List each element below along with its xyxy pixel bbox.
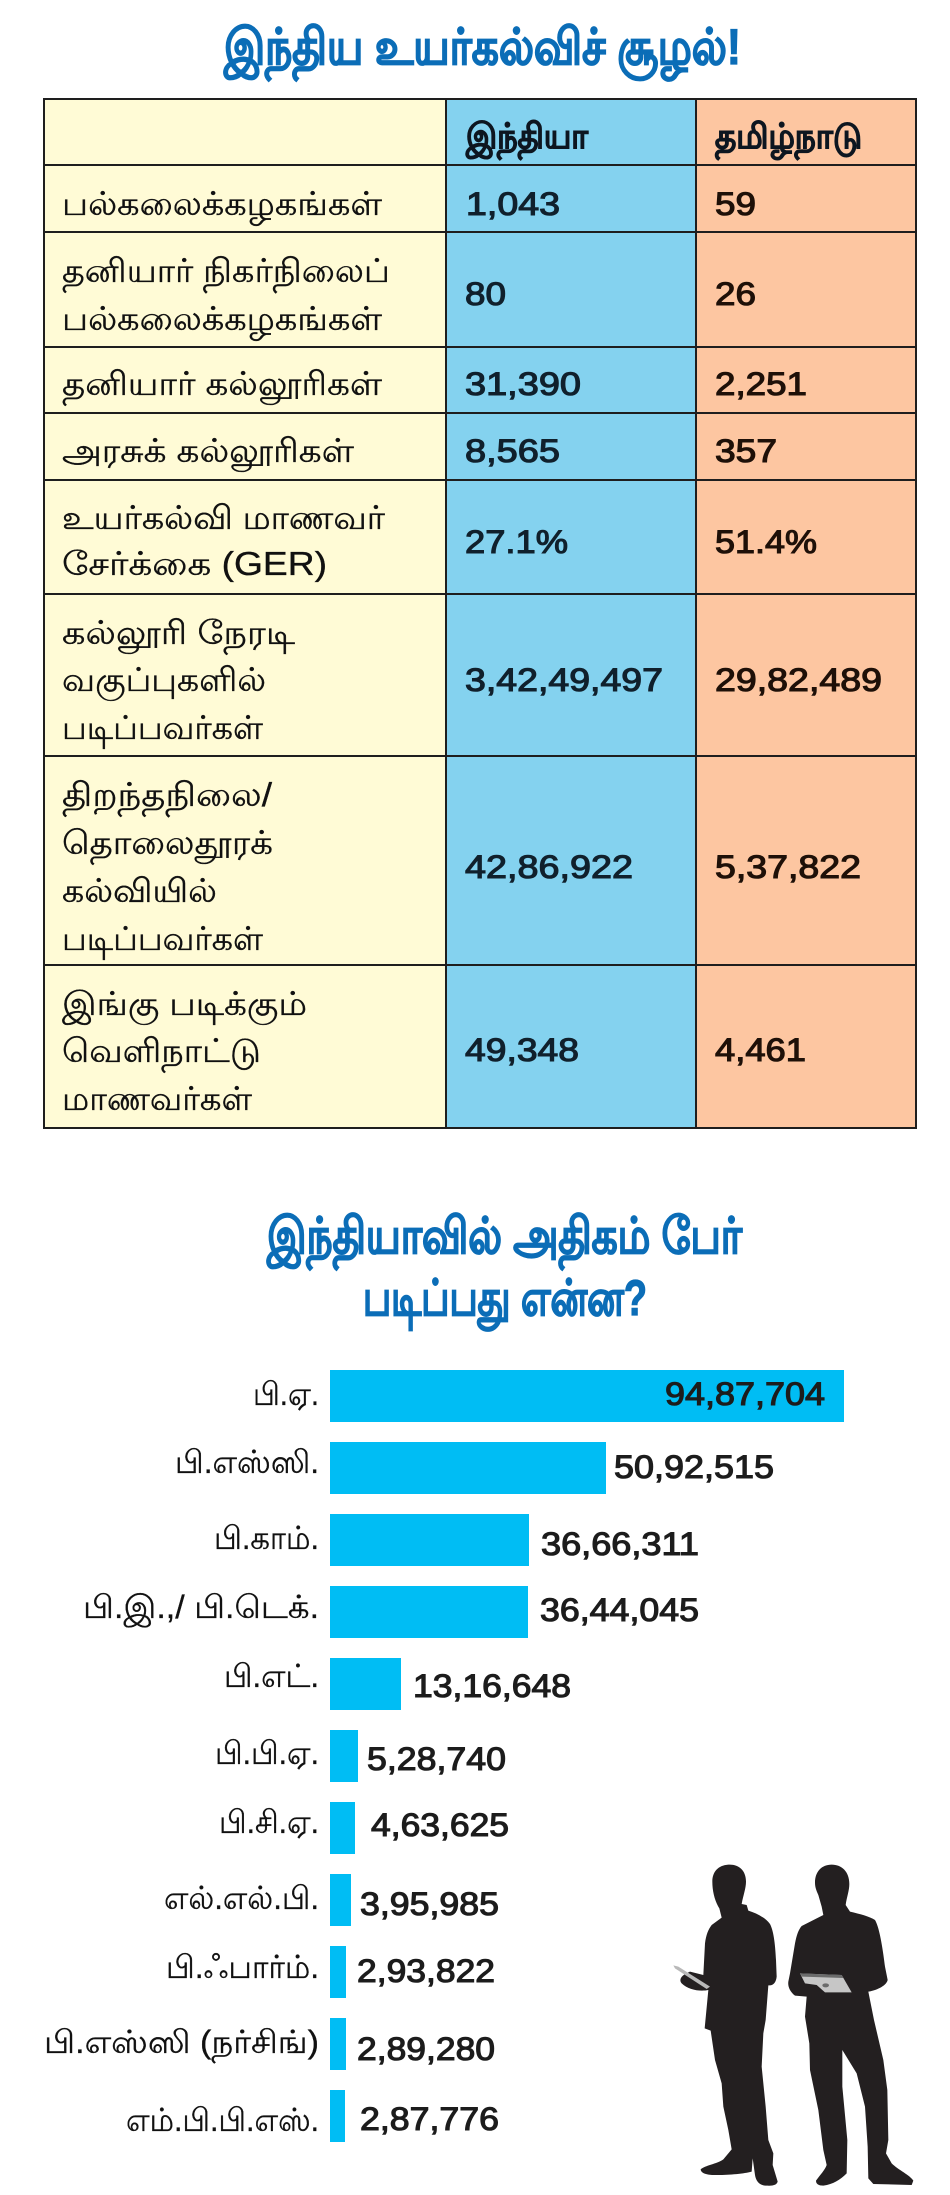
row: universities: 1,043 (466, 186, 560, 222)
bar: BPharm: 2,93,822 (357, 1953, 495, 1989)
row: universities: பல்கலைக்கழகங்கள் (62, 185, 382, 226)
row: private deemed universities (62, 252, 756, 341)
row: table header: தமிழ்நாடு (715, 117, 862, 161)
bar: MBBS: 2,87,776 (360, 2101, 499, 2137)
row: regular college students: கல்லூரி நேரடி (62, 614, 295, 655)
bar: BE / BTech: பி.இ.,/ பி.டெக். (83, 1589, 319, 1627)
row: foreign students: இங்கு படிக்கும் (62, 985, 307, 1025)
row: private colleges: 2,251 (715, 366, 807, 402)
row: foreign students: மாணவர்கள் (62, 1080, 252, 1117)
bar: BEd: பி.எட். (224, 1658, 319, 1694)
row: foreign students: 49,348 (465, 1032, 579, 1068)
row: open and distance learning students (62, 776, 861, 960)
bar: BA (253, 1370, 844, 1422)
icon: left tablet (673, 1965, 710, 1989)
bar: BCA: 4,63,625 (371, 1807, 509, 1843)
row: gross enrolment ratio (62, 499, 817, 582)
row: foreign students: வெளிநாட்டு (62, 1032, 261, 1073)
row: government colleges: அரசுக் கல்லூரிகள் (62, 432, 354, 472)
row: gross enrolment ratio: உயர்கல்வி மாணவர் (62, 499, 386, 536)
row: regular college students (62, 614, 882, 749)
row: regular college students: படிப்பவர்கள் (62, 709, 263, 749)
bar: LLB (164, 1874, 499, 1926)
icon: right tablet (800, 1973, 852, 1992)
heading: what do most people study in India: இந்தியாவில் அதிகம் பேர் (266, 1208, 743, 1272)
bar: BEd: 13,16,648 (413, 1668, 571, 1704)
bar: BBA: 5,28,740 (367, 1741, 506, 1777)
bar: BSc: 50,92,515 (614, 1449, 774, 1485)
icon: two standing student silhouettes with tablets (673, 1865, 913, 2186)
row: regular college students: வகுப்புகளில் (62, 661, 266, 701)
bar: BSc Nursing: பி.எஸ்ஸி (நர்சிங்) (44, 2024, 319, 2064)
row: open and distance learning students: திறந்தநிலை/ (62, 776, 273, 817)
bar: BBA: பி.பி.ஏ. (215, 1735, 319, 1771)
silhouette: right student (788, 1865, 913, 2186)
table column backgrounds (44, 99, 916, 1128)
bar: BSc (175, 1442, 774, 1494)
table grid lines (44, 99, 916, 1128)
row: private deemed universities: 26 (715, 276, 756, 312)
bar: BE / BTech: 36,44,045 (540, 1592, 699, 1628)
row: private colleges: தனியார் கல்லூரிகள் (62, 365, 382, 406)
bar: BCA: பி.சி.ஏ. (219, 1804, 319, 1840)
bar: BCA (219, 1802, 509, 1854)
row: table header (465, 117, 862, 161)
row: gross enrolment ratio: சேர்க்கை (GER) (62, 545, 327, 582)
row: private deemed universities: 80 (465, 276, 506, 312)
row: foreign students (62, 985, 806, 1117)
row: private colleges (62, 365, 807, 406)
row: open and distance learning students: கல்வியில் (62, 872, 217, 909)
bar chart: enrolment by course (44, 1370, 844, 2142)
row: open and distance learning students: தொலைதூரக் (62, 824, 273, 865)
bar: BSc Nursing (44, 2018, 495, 2070)
row: regular college students: 3,42,49,497 (465, 662, 663, 698)
bar: MBBS: எம்.பி.பி.எஸ். (126, 2102, 319, 2138)
bar: BPharm (166, 1946, 495, 1998)
row: gross enrolment ratio: 51.4% (715, 524, 817, 560)
bar: BA: பி.ஏ. (253, 1376, 319, 1412)
row: open and distance learning students: 5,37,822 (715, 849, 861, 885)
row: government colleges (62, 432, 777, 472)
bar: BE / BTech (83, 1586, 699, 1638)
row: table header: இந்தியா (465, 117, 589, 161)
bar: LLB: எல்.எல்.பி. (164, 1880, 319, 1916)
row: government colleges: 357 (715, 433, 777, 469)
row: private deemed universities: தனியார் நிகர்நிலைப் (62, 252, 390, 293)
row: private deemed universities: பல்கலைக்கழகங்கள் (62, 300, 382, 341)
row: regular college students: 29,82,489 (715, 662, 882, 698)
bar: MBBS (126, 2090, 499, 2142)
row: open and distance learning students: படிப்பவர்கள் (62, 920, 263, 960)
row: foreign students: 4,461 (715, 1032, 806, 1068)
heading: what do most people study in India: படிப்பது என்ன? (363, 1270, 647, 1331)
bar: BBA (215, 1730, 506, 1782)
row: government colleges: 8,565 (465, 433, 560, 469)
bar: BSc: பி.எஸ்ஸி. (175, 1444, 319, 1480)
row: gross enrolment ratio: 27.1% (465, 524, 568, 560)
bar: BCom (214, 1514, 699, 1566)
heading: what do most people study in India (266, 1208, 743, 1331)
row: private colleges: 31,390 (465, 366, 581, 402)
bar: LLB: 3,95,985 (360, 1886, 499, 1922)
row: open and distance learning students: 42,86,922 (465, 849, 633, 885)
bar: BEd (224, 1658, 571, 1710)
bar: BSc Nursing: 2,89,280 (357, 2031, 495, 2067)
row: universities: 59 (715, 186, 756, 222)
bar: BPharm: பி.ஃபார்ம். (166, 1949, 319, 1985)
bar: BCom: 36,66,311 (541, 1526, 699, 1562)
bar: BCom: பி.காம். (214, 1520, 319, 1556)
bar: BA: 94,87,704 (665, 1376, 825, 1412)
title: Indian higher education scene: இந்திய உயர்கல்விச் சூழல்! (223, 19, 741, 83)
silhouette: left student (680, 1865, 778, 2186)
row: universities (62, 185, 756, 226)
panel: comparison table (44, 99, 916, 1128)
